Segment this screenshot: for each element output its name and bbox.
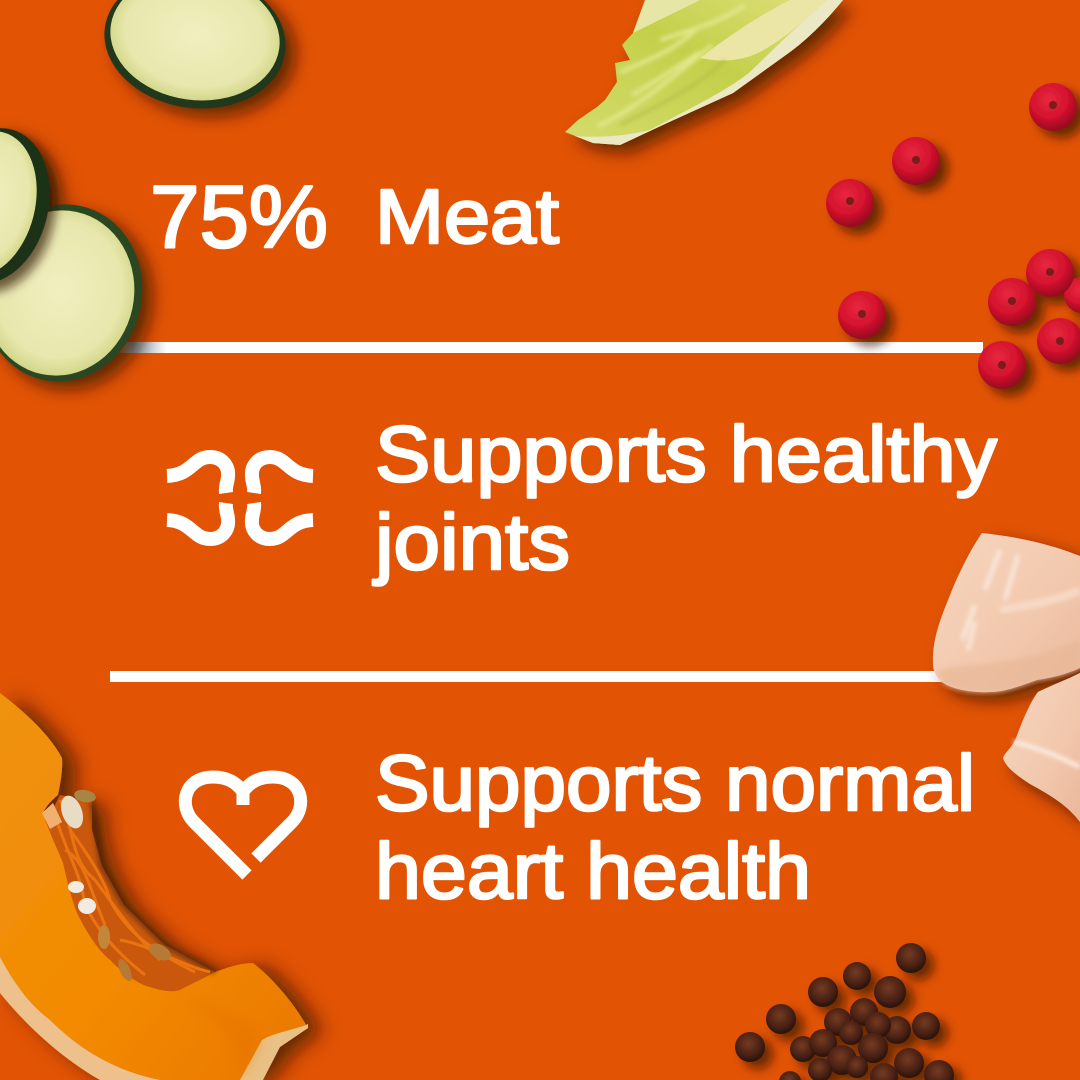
divider: top <box>115 342 983 353</box>
heading: Meat: Meat <box>375 174 559 260</box>
photo: chicken pieces <box>933 533 1080 822</box>
photo: cranberries <box>826 83 1080 389</box>
stat: 75%: 75% <box>150 167 328 266</box>
text: Supports normal heart health <box>375 738 975 915</box>
photo: peppercorns <box>735 943 954 1080</box>
photo: pumpkin wedge <box>0 693 308 1080</box>
icon: joints <box>167 457 313 539</box>
photo: lettuce leaf <box>565 0 843 145</box>
photo: zucchini slice top <box>95 0 295 120</box>
photo: zucchini slices left <box>0 116 159 397</box>
text: Supports normal heart health: heart health <box>375 826 811 915</box>
text: Supports healthy joints <box>373 409 998 586</box>
divider: bottom <box>110 671 945 682</box>
text: Supports healthy joints: joints <box>373 497 570 586</box>
text: Supports normal heart health: Supports normal <box>375 738 975 827</box>
icon: heart <box>185 777 301 875</box>
text: Supports healthy joints: Supports healthy <box>375 409 998 498</box>
